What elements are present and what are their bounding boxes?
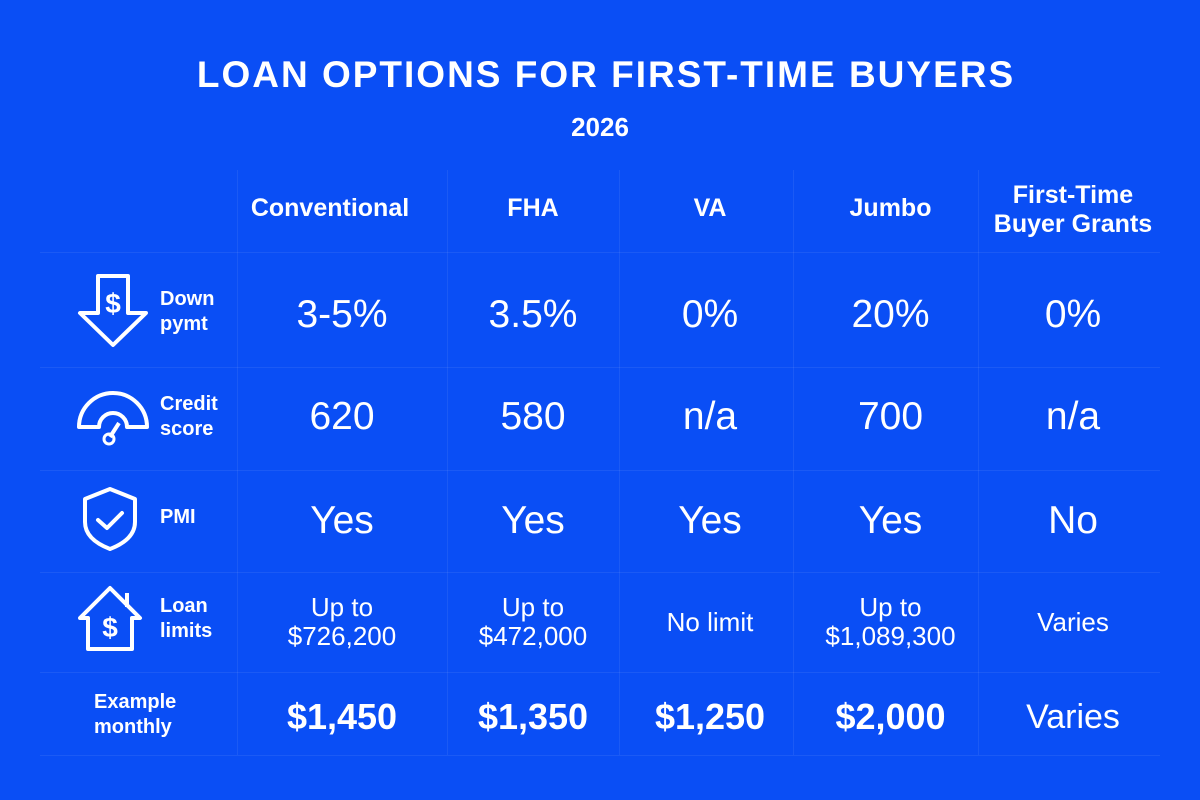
row: loan limits values: $1,089,300 [825,621,956,651]
header: VA: VA [694,194,726,222]
row: PMI values: No [1048,499,1098,542]
row: loan limits values: $472,000 [479,621,587,651]
row: loan limits values: No limit [667,606,753,636]
row: credit score values [309,394,1100,438]
row: credit score values: 580 [500,394,566,438]
row: loan limits values [288,592,1109,651]
row label: Example monthly: monthly [94,716,172,738]
row: example monthly values: $2,000 [835,696,946,737]
row: PMI values: Yes [310,499,374,542]
header: FHA: FHA [507,194,559,222]
row: down payment values [296,292,1101,336]
row: down payment values: 0% [682,292,738,336]
row: example monthly values: Varies [1026,698,1120,736]
row: loan limits values: Up to [502,592,564,622]
row label: Loan limits with house icon [78,586,212,651]
row: PMI values: Yes [859,499,922,542]
row: credit score values: 620 [309,394,375,438]
row label: Credit score with icon: Credit [160,393,218,415]
row label: PMI with shield icon [83,487,196,551]
row label: Loan limits with house icon: limits [160,620,212,642]
row: down payment values: 0% [1045,292,1101,336]
row label: Down pymt with icon: Down [160,288,214,310]
row label: Example monthly [94,691,176,738]
row label: Credit score with icon [77,391,218,446]
row: example monthly values: $1,350 [478,696,588,737]
row: PMI values: Yes [678,499,742,542]
row: loan limits values: Up to [859,592,922,622]
row: credit score values: 700 [858,394,923,438]
row: example monthly values: $1,250 [655,696,765,737]
row label: PMI with shield icon: PMI [160,506,196,528]
row: PMI values: Yes [501,499,565,542]
row label: Loan limits with house icon: $ [102,612,118,643]
row: loan limits values: $726,200 [288,621,396,651]
row: example monthly values [287,696,1120,737]
row: example monthly values: $1,450 [287,696,397,737]
row: down payment values: 3-5% [296,292,388,336]
row: loan limits values: Varies [1037,606,1109,636]
row label: Down pymt with icon: pymt [160,313,208,335]
header: grants: First-Time [1013,181,1133,209]
title: LOAN OPTIONS FOR FIRST-TIME BUYERS [197,54,1015,95]
row label: Credit score with icon: score [160,418,213,440]
row: down payment values: 20% [851,292,930,336]
row: credit score values: n/a [683,394,737,438]
row: PMI values [310,499,1098,542]
row label: Down pymt with icon: $ [105,288,121,319]
row: credit score values: n/a [1046,394,1100,438]
row label: Example monthly: Example [94,691,176,713]
table [77,181,1152,738]
row label: Loan limits with house icon: Loan [160,595,208,617]
header: grants [994,181,1152,238]
subtitle: year: 2026 [571,112,629,142]
header: Jumbo: Jumbo [850,194,931,222]
row: down payment values: 3.5% [489,292,577,336]
row label: Down pymt with icon [78,274,214,348]
header: grants: Buyer Grants [994,210,1152,238]
header: Conventional: Conventional [251,194,409,222]
row: loan limits values: Up to [311,592,373,622]
